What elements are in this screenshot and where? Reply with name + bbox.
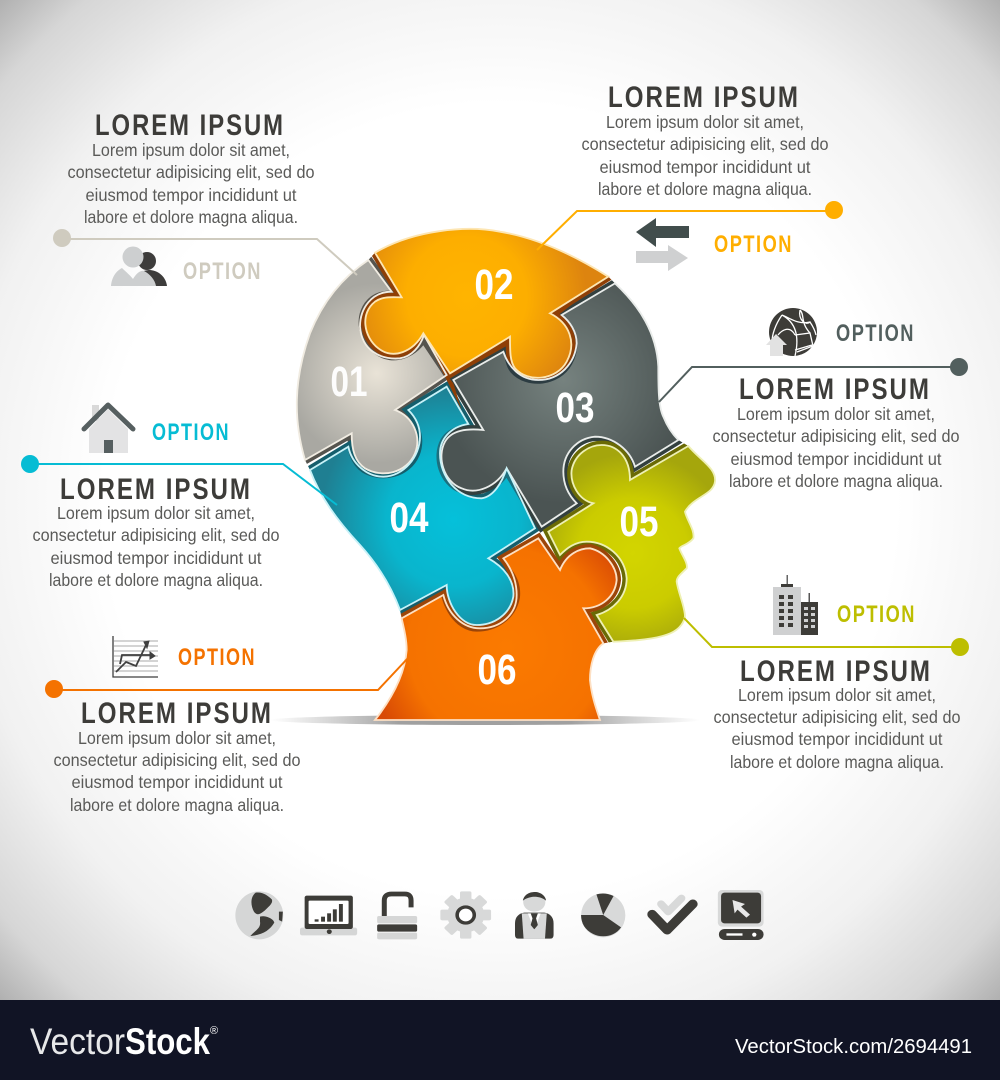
icon: line chart: [113, 636, 158, 677]
option label 06: OPTION: [178, 644, 256, 671]
icon: exchange arrows: [636, 218, 689, 271]
text block 02: eiusmod tempor incididunt ut: [600, 157, 811, 177]
text block 05: LOREM IPSUM: [740, 655, 932, 688]
icon: house: [84, 405, 133, 453]
puzzle head: [297, 229, 715, 720]
text block 03: LOREM IPSUM: [739, 373, 931, 406]
text block 04: consectetur adipisicing elit, sed do: [32, 525, 280, 545]
text block 05: eiusmod tempor incididunt ut: [732, 729, 943, 749]
text block 03: labore et dolore magna aliqua.: [729, 471, 943, 491]
text block 03: consectetur adipisicing elit, sed do: [712, 426, 960, 446]
icon: check mark: [652, 898, 693, 930]
text block 06: LOREM IPSUM: [81, 697, 273, 730]
option label 04: OPTION: [152, 419, 230, 446]
icon: people: [111, 246, 167, 286]
text block 02: LOREM IPSUM: [608, 81, 800, 114]
text block 03: Lorem ipsum dolor sit amet,: [737, 404, 935, 424]
text block 02: Lorem ipsum dolor sit amet,: [606, 112, 804, 132]
icon: businessman: [515, 892, 554, 939]
ground shadow under head: [270, 715, 700, 725]
text block 05: consectetur adipisicing elit, sed do: [714, 707, 960, 727]
text block 06: labore et dolore magna aliqua.: [70, 795, 284, 815]
text block 06: [54, 697, 300, 815]
icon: gear: [440, 891, 491, 939]
text block 02: consectetur adipisicing elit, sed do: [582, 134, 828, 154]
number 02: 02: [474, 261, 514, 309]
option label 03: OPTION: [836, 320, 915, 347]
connector 03: [659, 358, 968, 402]
text block 05: [714, 655, 960, 772]
text block 03: eiusmod tempor incididunt ut: [730, 449, 942, 469]
text block 06: Lorem ipsum dolor sit amet,: [78, 728, 276, 748]
text block 01: labore et dolore magna aliqua.: [84, 207, 298, 227]
icon: buildings: [773, 575, 818, 635]
text block 04: labore et dolore magna aliqua.: [49, 570, 263, 590]
connector 01: [53, 229, 357, 275]
footer logo: ®: [210, 1025, 218, 1037]
number 01: 01: [330, 358, 368, 406]
piece 01 grey: [298, 261, 444, 472]
text block 03: [712, 373, 960, 491]
option label 05: OPTION: [837, 601, 916, 628]
text block 01: Lorem ipsum dolor sit amet,: [92, 140, 290, 160]
icon: network globe: [766, 308, 817, 356]
text block 01: eiusmod tempor incididunt ut: [86, 185, 297, 205]
bottom icon row: [235, 890, 764, 940]
icon: open padlock: [377, 894, 417, 939]
number 03: 03: [556, 384, 594, 432]
text block 02: labore et dolore magna aliqua.: [598, 179, 812, 199]
number 05: 05: [620, 498, 658, 546]
piece 06 orange: [377, 540, 616, 720]
icon: laptop chart: [300, 896, 357, 935]
connector 02: [537, 201, 843, 250]
number 06: 06: [478, 646, 516, 694]
number 04: 04: [390, 494, 429, 542]
outlines of pieces: [297, 229, 715, 720]
option label 02: OPTION: [714, 231, 793, 258]
text block 05: Lorem ipsum dolor sit amet,: [738, 685, 936, 705]
footer image id: VectorStock.com/2694491: [735, 1036, 972, 1058]
seam fill between pieces: [306, 253, 688, 644]
text block 01: [68, 109, 314, 227]
text block 04: Lorem ipsum dolor sit amet,: [57, 503, 255, 523]
footer bar: [0, 1000, 1000, 1080]
footer logo: VectorStock: [30, 1021, 226, 1062]
text block 06: consectetur adipisicing elit, sed do: [54, 750, 300, 770]
piece 05 lime: [550, 446, 714, 641]
text block 04: [32, 473, 280, 590]
connector 04: [21, 455, 337, 505]
piece 04 teal: [311, 388, 534, 624]
option label 01: OPTION: [183, 258, 262, 285]
icon: pie chart: [581, 893, 625, 937]
text block 05: labore et dolore magna aliqua.: [730, 752, 944, 772]
text block 01: consectetur adipisicing elit, sed do: [68, 162, 314, 182]
text block 04: eiusmod tempor incididunt ut: [50, 548, 262, 568]
icon: desktop computer: [718, 890, 764, 940]
text block 06: eiusmod tempor incididunt ut: [72, 772, 283, 792]
connector 06: [45, 658, 408, 698]
piece 02 amber: [365, 229, 608, 410]
icon: globe: [235, 891, 283, 939]
connector 05: [684, 618, 969, 656]
text block 01: LOREM IPSUM: [95, 109, 285, 142]
text block 04: LOREM IPSUM: [60, 473, 252, 506]
text block 02: [582, 81, 828, 199]
piece 03 slate: [442, 284, 677, 525]
